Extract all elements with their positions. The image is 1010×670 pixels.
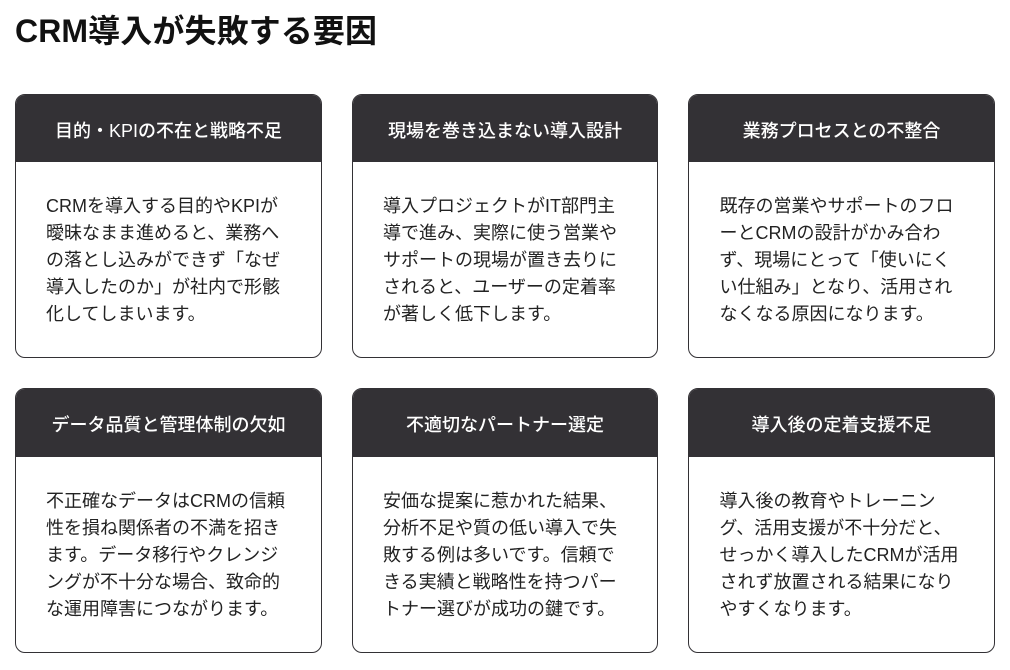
panel text: design without field involvement: 導入プロジェクトがIT部門主 [383,196,615,216]
panel text: data quality and governance: 性を損ね関係者の不満を招き [46,518,280,538]
panel text: design without field involvement: されると、ユーザーの定着率 [383,277,616,297]
panel text: process mismatch: 既存の営業やサポートのフロ [720,196,954,216]
panel text: partner selection: 分析不足や質の低い導入で失 [383,518,617,538]
panel text: missing goals and KPIs: 曖昧なまま進めると、業務へ [46,223,279,243]
panel text: design without field involvement [383,196,617,324]
panel text: design without field involvement: が著しく低下します。 [383,304,561,324]
panel text: process mismatch: ーとCRMの設計がかみ合わ [720,223,940,243]
panel: post-launch support [688,388,995,653]
panel text: partner selection: きる実績と戦略性を持つパー [383,572,617,592]
panel heading: missing goals and KPIs: 目的・KPIの不在と戦略不足 [55,121,282,141]
panel heading: partner selection [352,388,658,457]
panel heading: post-launch support [688,388,995,457]
panel text: data quality and governance: な運用障害につながります。 [46,599,278,619]
panel: partner selection [352,388,658,653]
panel heading: partner selection: 不適切なパートナー選定 [406,415,604,435]
panel text: design without field involvement: 導で進み、実際に使う営業や [383,223,617,243]
panel text: missing goals and KPIs [46,196,280,324]
panel text: partner selection: 安価な提案に惹かれた結果、 [383,491,617,511]
panel heading: missing goals and KPIs [15,94,322,162]
panel: data quality and governance [15,388,322,653]
panel text: post-launch support: グ、活用支援が不十分だと、 [720,518,952,538]
panel heading: process mismatch: 業務プロセスとの不整合 [743,121,940,141]
panel: missing goals and KPIs [15,94,322,358]
panel text: data quality and governance: 不正確なデータはCRMの信頼 [46,491,285,511]
panel text: missing goals and KPIs: 化してしまいます。 [46,304,206,324]
panel text: missing goals and KPIs: の落とし込みができず「なぜ [46,250,280,270]
panel text: data quality and governance: ます。データ移行やクレンジ [46,545,278,565]
panel text: process mismatch: ず、現場にとって「使いにく [720,250,950,270]
panel heading: process mismatch [688,94,995,162]
panel heading: design without field involvement [352,94,658,162]
title: CRM導入が失敗する要因 [15,13,377,49]
panel text: post-launch support: されず放置される結果になり [720,572,954,592]
panel text: process mismatch [720,196,954,324]
panel heading: data quality and governance [15,388,322,457]
panel text: partner selection: トナー選びが成功の鍵です。 [383,599,615,619]
panel text: post-launch support: 導入後の教育やトレーニン [720,491,936,511]
panel text: post-launch support: せっかく導入したCRMが活用 [720,545,958,565]
panel text: missing goals and KPIs: CRMを導入する目的やKPIが [46,196,278,216]
panel text: process mismatch: い仕組み」となり、活用され [720,277,952,297]
panel text: missing goals and KPIs: 導入したのか」が社内で形骸 [46,277,280,297]
panel text: partner selection [383,491,617,619]
panel text: process mismatch: なくなる原因になります。 [720,304,934,324]
panel: process mismatch [688,94,995,358]
panel text: data quality and governance [46,491,285,619]
panel heading: post-launch support: 導入後の定着支援不足 [752,415,932,435]
panel heading: data quality and governance: データ品質と管理体制の欠如 [52,415,286,435]
panel: design without field involvement [352,94,658,358]
panel heading: design without field involvement: 現場を巻き込まない導入設計 [388,121,622,141]
panel text: post-launch support: やすくなります。 [720,599,862,619]
panel text: data quality and governance: ングが不十分な場合、致命的 [46,572,280,592]
panel text: design without field involvement: サポートの現場が置き去りに [383,250,617,270]
panel text: post-launch support [720,491,958,619]
panel text: partner selection: 敗する例は多いです。信頼で [383,545,615,565]
